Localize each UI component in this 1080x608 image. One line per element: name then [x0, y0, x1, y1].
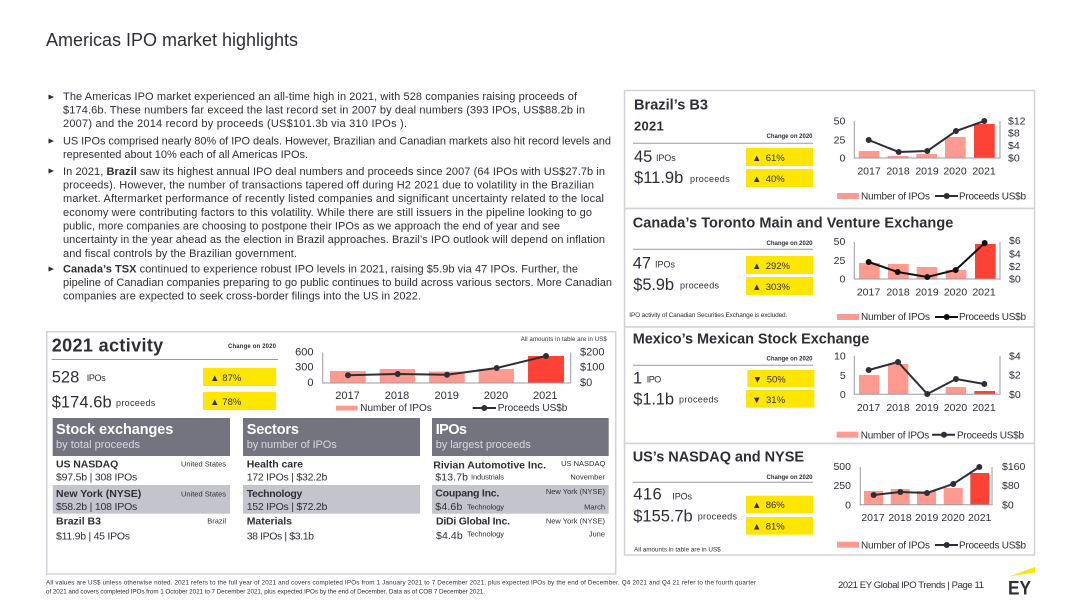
text block: bullet commentary — [48, 91, 612, 302]
stat: IPOs: 86% — [766, 500, 785, 511]
bullet: record year — [48, 91, 585, 130]
column: sectors: Health care — [247, 458, 303, 470]
chart: activity 2017-2021: 2017 — [335, 390, 360, 402]
footnote: of 2021 and covers completed IPOs from 1 October 2021 to 7 December 2021, plus expected IPOs by the end of December. Data as of COB 7 December 2021. — [46, 588, 485, 596]
column: sectors: Materials — [247, 516, 292, 528]
column: IPOs: by largest proceeds — [436, 439, 531, 451]
stat: proceeds: 303% — [766, 282, 791, 293]
stat: proceeds: 78% — [222, 397, 242, 408]
chart: Canada: $2 — [1009, 261, 1021, 273]
stat: IPOs: ▲ — [752, 153, 761, 164]
chart: Brazil: 2018 — [886, 165, 910, 177]
chart: US: 2021 — [968, 512, 992, 524]
chart: US: $80 — [1002, 480, 1020, 492]
chart: Canada: 50 — [834, 236, 845, 248]
column: stock exchanges: New York (NYSE) — [56, 488, 141, 500]
chart: Brazil: 0 — [839, 153, 845, 165]
chart: Brazil — [834, 115, 1026, 177]
column: stock exchanges: United States — [181, 490, 226, 498]
stat: proceeds: $174.6b — [52, 394, 112, 412]
chart: Brazil: $0 — [1008, 153, 1020, 165]
heading: US: US’s NASDAQ and NYSE — [633, 450, 804, 466]
panel: US — [624, 444, 1034, 555]
stat: proceeds: ▲ — [752, 522, 761, 532]
chart: Brazil: 2020 — [943, 165, 967, 177]
bullet: Canada: companies are expected to seek cross-border filings into the US in 2022. — [63, 290, 421, 302]
stat: proceeds: ▲ — [752, 174, 761, 185]
stat: proceeds: proceeds — [116, 398, 156, 408]
chart: Canada: 2021 — [972, 287, 996, 299]
stat: IPOs: IPOs — [672, 491, 692, 501]
label: change on 2020: Change on 2020 — [766, 357, 813, 363]
stat: proceeds: ▼ — [752, 395, 761, 406]
chart: Mexico: $0 — [1009, 389, 1021, 401]
stat: IPOs: IPOs — [656, 153, 676, 163]
column: sectors — [243, 418, 420, 542]
note: Canada exclusion: IPO activity of Canadian Securities Exchange is excluded. — [629, 312, 787, 319]
label: change on 2020: Change on 2020 — [766, 134, 813, 140]
legend: Canada: Number of IPOs — [861, 312, 930, 323]
chart: Brazil: 25 — [834, 134, 845, 146]
chart: US: 2019 — [915, 512, 939, 524]
column: IPOs: Technology — [467, 530, 504, 539]
stat: IPOs: ▲ — [752, 500, 761, 511]
heading: Brazil's B3: Brazil’s B3 — [634, 98, 708, 114]
column: stock exchanges: United States — [181, 460, 226, 469]
column: IPOs: New York (NYSE) — [546, 516, 606, 525]
stat: proceeds: 81% — [766, 522, 785, 532]
panel: 2021 activity — [47, 332, 616, 574]
stat: IPO — [633, 370, 814, 388]
chart: US: 2020 — [941, 512, 965, 524]
chart: Mexico: 10 — [834, 350, 846, 362]
label: change on 2020: Change on 2020 — [228, 344, 277, 350]
label: change on 2020: Change on 2020 — [766, 241, 813, 247]
legend: Canada — [837, 312, 1026, 323]
chart: Canada: 2020 — [944, 287, 967, 299]
chart: activity 2017-2021: 600 — [295, 346, 314, 358]
chart: Brazil: $12 — [1008, 115, 1026, 127]
heading: Mexico: Mexico’s Mexican Stock Exchange — [633, 331, 869, 347]
column: IPOs: Rivian Automotive Inc. — [433, 459, 546, 471]
chart: Brazil: 2021 — [972, 165, 996, 177]
chart: Mexico — [834, 350, 1021, 414]
chart: Mexico: 2017 — [857, 402, 880, 414]
chart: Brazil: 2019 — [915, 165, 939, 177]
stat: IPO: ▼ — [753, 374, 762, 386]
chart: US: $0 — [1002, 499, 1014, 511]
chart: Canada: $0 — [1009, 273, 1021, 285]
stat: IPO: IPO — [647, 375, 661, 385]
chart: Mexico: 0 — [840, 389, 846, 401]
column: IPOs: New York (NYSE) — [546, 487, 606, 496]
chart: US — [833, 461, 1026, 524]
stat: IPOs — [634, 148, 813, 166]
chart: activity 2017-2021: 300 — [295, 362, 314, 374]
stat: proceeds: 40% — [766, 174, 785, 185]
legend: Brazil: Proceeds US$b — [959, 191, 1026, 202]
column: IPOs: Technology — [467, 502, 504, 511]
panel: Brazil's B3 — [624, 90, 1034, 208]
stat: proceeds — [633, 390, 814, 408]
stat: proceeds: proceeds — [680, 280, 720, 290]
column: stock exchanges: Stock exchanges — [56, 422, 173, 438]
stat: proceeds: 31% — [766, 395, 786, 406]
chart: activity 2017-2021: $200 — [580, 346, 604, 358]
stat: IPOs — [52, 368, 276, 386]
bullet: Brazil: and fiscal controls by the Brazilian government. — [63, 248, 297, 260]
chart: activity 2017-2021: 2020 — [484, 390, 508, 402]
logo: EY: EY — [1008, 578, 1031, 600]
stat: IPOs: 47 — [633, 254, 651, 272]
chart: Canada: 0 — [839, 273, 845, 285]
legend: Canada: Proceeds US$b — [959, 312, 1026, 323]
column: IPOs: US NASDAQ — [561, 459, 605, 468]
column: IPOs: $13.7b — [435, 471, 468, 483]
legend: activity chart — [336, 403, 568, 414]
stat: proceeds: $5.9b — [633, 276, 674, 294]
chart: Canada — [834, 235, 1021, 299]
bullet: Canada: pipeline of Canadian companies preparing to go public continues to build across various sectors. More Canadian — [63, 277, 612, 289]
bullet: US share: represented about 10% each of all Americas IPOs. — [63, 149, 308, 161]
footnote — [46, 580, 756, 596]
column: IPOs: March — [584, 502, 605, 511]
column: IPOs: June — [589, 530, 605, 539]
bullet: Brazil: In 2021, Brazil saw its highest annual IPO deal numbers and proceeds since 2007 (64 IPOs with US$27.7b in — [63, 166, 605, 178]
page label: 2021 EY Global IPO Trends | Page 11 — [838, 580, 984, 591]
bullet: Brazil: uncertainty in the year ahead as the election in Brazil approaches. Brazil’s IPO outlook will depend on inflation — [63, 234, 605, 246]
chart: activity 2017-2021 — [295, 346, 604, 402]
panel: Canada — [624, 208, 1034, 327]
bullet: record year: $174.6b. These numbers far exceed the last record set in 2007 by deal numbers (393 IPOs, US$88.2b in — [63, 104, 585, 116]
stat: IPOs: 416 — [633, 486, 662, 504]
column: stock exchanges: by total proceeds — [56, 439, 140, 451]
legend: Brazil: Number of IPOs — [861, 191, 930, 202]
panel: Mexico — [624, 327, 1034, 444]
chart: Canada: 2019 — [915, 287, 939, 299]
column: IPOs: DiDi Global Inc. — [436, 516, 510, 528]
note: amounts: All amounts in table are in US$ — [634, 546, 721, 554]
stat: proceeds: proceeds — [679, 395, 719, 405]
heading: 2021 activity: 2021 activity — [52, 336, 163, 356]
column: IPOs: November — [570, 473, 605, 482]
chart: Mexico: $4 — [1009, 350, 1021, 362]
column: stock exchanges: Brazil B3 — [56, 516, 101, 528]
column: IPOs: Coupang Inc. — [435, 488, 499, 500]
label: change on 2020: Change on 2020 — [766, 475, 813, 481]
legend: activity chart: Number of IPOs — [360, 403, 432, 414]
column: sectors: Technology — [247, 488, 302, 500]
chart: Brazil: $4 — [1008, 140, 1020, 152]
footnote: All values are US$ unless otherwise noted. 2021 refers to the full year of 2021 and covers completed IPOs from 1 January 2021 to 7 December 2021, plus expected IPOs by the end of December. Q4 2021 and Q4 21 refer to the fourth quarter — [46, 580, 756, 586]
chart: Mexico: 2019 — [915, 402, 939, 414]
stat: proceeds: ▲ — [210, 397, 219, 408]
stat: proceeds — [633, 276, 813, 295]
column: stock exchanges: Brazil — [207, 516, 226, 526]
chart: US: 250 — [833, 480, 851, 492]
title: Americas IPO market highlights — [46, 30, 298, 50]
chart: Brazil: 2017 — [857, 165, 881, 177]
column: sectors: 172 IPOs | $32.2b — [247, 472, 327, 484]
chart: activity 2017-2021: 2019 — [434, 390, 459, 402]
column: stock exchanges: $97.5b | 308 IPOs — [56, 472, 137, 484]
chart: activity 2017-2021: 2018 — [385, 390, 409, 402]
chart: Canada: 25 — [834, 255, 845, 267]
legend: Brazil — [837, 191, 1026, 202]
legend: US: Number of IPOs — [861, 540, 930, 551]
chart: Mexico: 2021 — [972, 402, 996, 414]
stat: IPOs: IPOs — [87, 373, 106, 383]
chart: activity 2017-2021: $100 — [580, 362, 604, 374]
stat: proceeds — [633, 507, 813, 535]
stat: IPO: 1 — [633, 370, 642, 388]
stat: IPOs: 528 — [52, 368, 79, 386]
stat: proceeds: $155.7b — [633, 507, 693, 525]
column: stock exchanges: $11.9b | 45 IPOs — [56, 530, 130, 542]
stat: IPO: 50% — [767, 374, 786, 386]
bullet: Canada: Canada’s TSX continued to experience robust IPO levels in 2021, raising $5.9b via 47 IPOs. Further, the — [63, 264, 578, 276]
heading: 2021: 2021 — [634, 118, 664, 134]
chart: activity 2017-2021: 2021 — [533, 390, 558, 402]
chart: US: 0 — [845, 499, 851, 511]
column: stock exchanges — [53, 418, 230, 542]
stat: proceeds: proceeds — [698, 512, 738, 522]
stat: proceeds: $11.9b — [634, 169, 683, 187]
chart: Mexico: 2020 — [944, 402, 967, 414]
chart: activity 2017-2021: $0 — [580, 377, 592, 389]
column: sectors: 152 IPOs | $72.2b — [247, 501, 327, 513]
bullet: record year: 2007) and the 2014 record by proceeds (US$101.3b via 310 IPOs ). — [63, 118, 407, 130]
chart: Mexico: 2018 — [886, 402, 910, 414]
column: IPOs — [432, 418, 609, 542]
bullet: Brazil: economy were contributing factors to this volatility. While there are still issuers in the pipeline looking to go — [63, 207, 592, 219]
chart: US: 500 — [833, 461, 851, 473]
stat: proceeds: $1.1b — [633, 390, 674, 408]
bullet: US share — [48, 136, 611, 161]
column: sectors: Sectors — [247, 422, 299, 438]
bullet: US share: US IPOs comprised nearly 80% of IPO deals. However, Brazilian and Canadian markets also hit record levels and — [63, 136, 611, 148]
chart: Mexico: 5 — [840, 370, 846, 382]
legend: Mexico: Proceeds US$b — [957, 430, 1024, 441]
bullet: Brazil: public, more companies are choosing to postpone their IPOs as we approach the end of year and see — [63, 220, 560, 232]
chart: Canada: $4 — [1009, 248, 1021, 260]
column: IPOs: $4.6b — [435, 501, 462, 513]
legend: US: Proceeds US$b — [959, 540, 1026, 551]
stat: proceeds: proceeds — [690, 174, 730, 184]
logo: EY — [1008, 567, 1035, 600]
column: stock exchanges: $58.2b | 108 IPOs — [56, 501, 137, 513]
stat: proceeds — [52, 392, 276, 412]
chart: US: 2017 — [861, 512, 885, 524]
chart: Canada: 2018 — [886, 287, 910, 299]
heading: Canada: Canada’s Toronto Main and Venture Exchange — [633, 216, 953, 232]
bullet: Canada — [48, 264, 612, 302]
column: IPOs: IPOs — [436, 422, 467, 438]
stat: IPOs: ▲ — [210, 373, 219, 384]
stat: IPOs: IPOs — [655, 260, 676, 270]
bullet: Brazil: proceeds). However, the number of transactions tapered off during H2 2021 due to volatility in the Brazilian — [63, 180, 594, 192]
chart: US: 2018 — [888, 512, 912, 524]
chart: Mexico: $2 — [1009, 370, 1021, 382]
chart: Brazil: 50 — [834, 115, 845, 127]
stat: IPOs — [633, 486, 813, 513]
bullet: Brazil — [48, 166, 605, 260]
note: amounts: All amounts in table are in US$ — [521, 337, 607, 343]
stat: proceeds: ▲ — [752, 282, 761, 293]
column: IPOs: Industrials — [471, 472, 504, 481]
chart: Canada: 2017 — [857, 287, 880, 299]
stat: proceeds — [634, 169, 813, 187]
legend: Mexico: Number of IPOs — [861, 430, 929, 441]
chart: activity 2017-2021: 0 — [307, 377, 314, 389]
chart: Canada: $6 — [1009, 235, 1021, 247]
column: sectors: 38 IPOs | $3.1b — [247, 530, 314, 542]
column: IPOs: $4.4b — [436, 530, 463, 542]
legend: activity chart: Proceeds US$b — [498, 403, 568, 414]
chart: Brazil: $8 — [1008, 128, 1020, 140]
bullet: Brazil: market. Aftermarket performance of recently listed companies and significant uncertainty related to the local — [63, 193, 604, 205]
stat: IPOs: 87% — [222, 373, 242, 384]
column: stock exchanges: US NASDAQ — [56, 458, 118, 470]
bullet: record year: The Americas IPO market experienced an all-time high in 2021, with 528 companies raising proceeds of — [63, 91, 578, 103]
stat: IPOs: 292% — [766, 261, 791, 272]
stat: IPOs: 61% — [766, 153, 785, 164]
legend: US — [837, 540, 1026, 551]
stat: IPOs: ▲ — [752, 261, 761, 272]
column: sectors: by number of IPOs — [247, 439, 337, 451]
stat: IPOs: 45 — [634, 148, 652, 166]
legend: Mexico — [837, 430, 1024, 441]
stat: IPOs — [633, 254, 813, 274]
chart: US: $160 — [1002, 461, 1026, 473]
